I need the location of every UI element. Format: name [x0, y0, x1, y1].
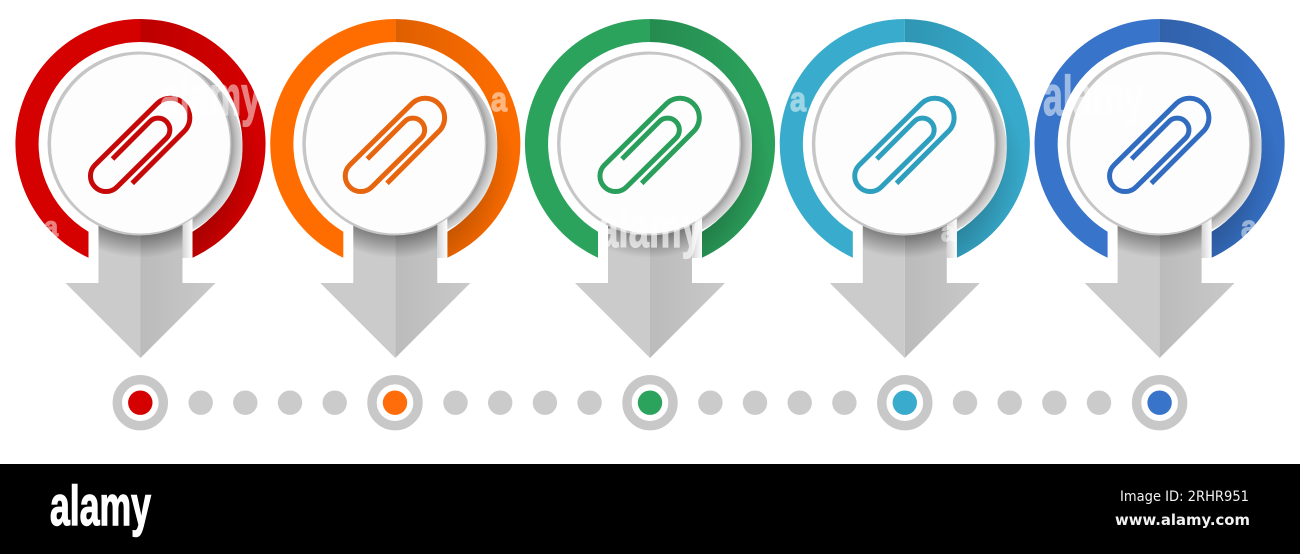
disc shadow: [317, 59, 497, 239]
white disc: [48, 52, 232, 236]
marker: green: [627, 380, 673, 426]
cyan ring: [780, 19, 1030, 258]
small grey dots 3: [698, 390, 857, 415]
disc shadow: [1082, 59, 1262, 239]
panel: red pin: [15, 19, 266, 358]
marker: orange: [372, 380, 418, 426]
watermarks: alamy: [598, 196, 702, 259]
website: www.alamy.com: [1115, 511, 1250, 529]
disc shadow: [827, 59, 1007, 239]
icon: paperclip: [855, 98, 954, 192]
arrow: down: [320, 214, 470, 358]
icon: paperclip: [600, 98, 699, 192]
watermarks: a: [1241, 209, 1257, 245]
white disc: [557, 52, 741, 236]
watermarks: [44, 64, 1257, 259]
watermarks: a: [491, 81, 508, 119]
arrow: down: [1085, 214, 1235, 358]
arrow: down: [66, 214, 216, 358]
icon: paperclip: [90, 98, 190, 192]
icon: paperclip: [1110, 98, 1209, 192]
blue ring: [1035, 19, 1285, 258]
marker: red: [117, 380, 163, 426]
green ring: [525, 19, 775, 258]
panel: blue pin: [1035, 19, 1285, 358]
marker: cyan: [882, 380, 928, 426]
watermarks: alamy: [1043, 64, 1144, 127]
white disc: [812, 52, 996, 236]
watermarks: a: [790, 81, 807, 119]
disc shadow: [62, 59, 242, 239]
watermarks: alamy: [160, 64, 261, 127]
marker: blue: [1137, 380, 1183, 426]
small grey dots 4: [953, 390, 1111, 415]
arrow: down: [575, 214, 725, 358]
panel: orange pin: [270, 19, 520, 358]
watermarks: a: [44, 211, 58, 242]
small grey dots 1: [188, 390, 347, 415]
icon: paperclip: [345, 98, 445, 192]
orange ring: [270, 19, 520, 258]
white disc: [1067, 52, 1251, 236]
image id: Image ID: 2RHR951: [1120, 489, 1249, 505]
red ring: [15, 19, 266, 258]
arrow: down: [830, 214, 980, 358]
small grey dots 2: [443, 390, 602, 415]
watermarks: a: [941, 216, 955, 247]
panel: cyan pin: [780, 19, 1030, 358]
timeline dots: [117, 380, 1183, 426]
white disc: [302, 52, 486, 236]
logo: alamy: alamy: [50, 474, 151, 537]
panel: green pin: [525, 19, 775, 358]
disc shadow: [572, 59, 752, 239]
footer band: [0, 464, 1300, 554]
